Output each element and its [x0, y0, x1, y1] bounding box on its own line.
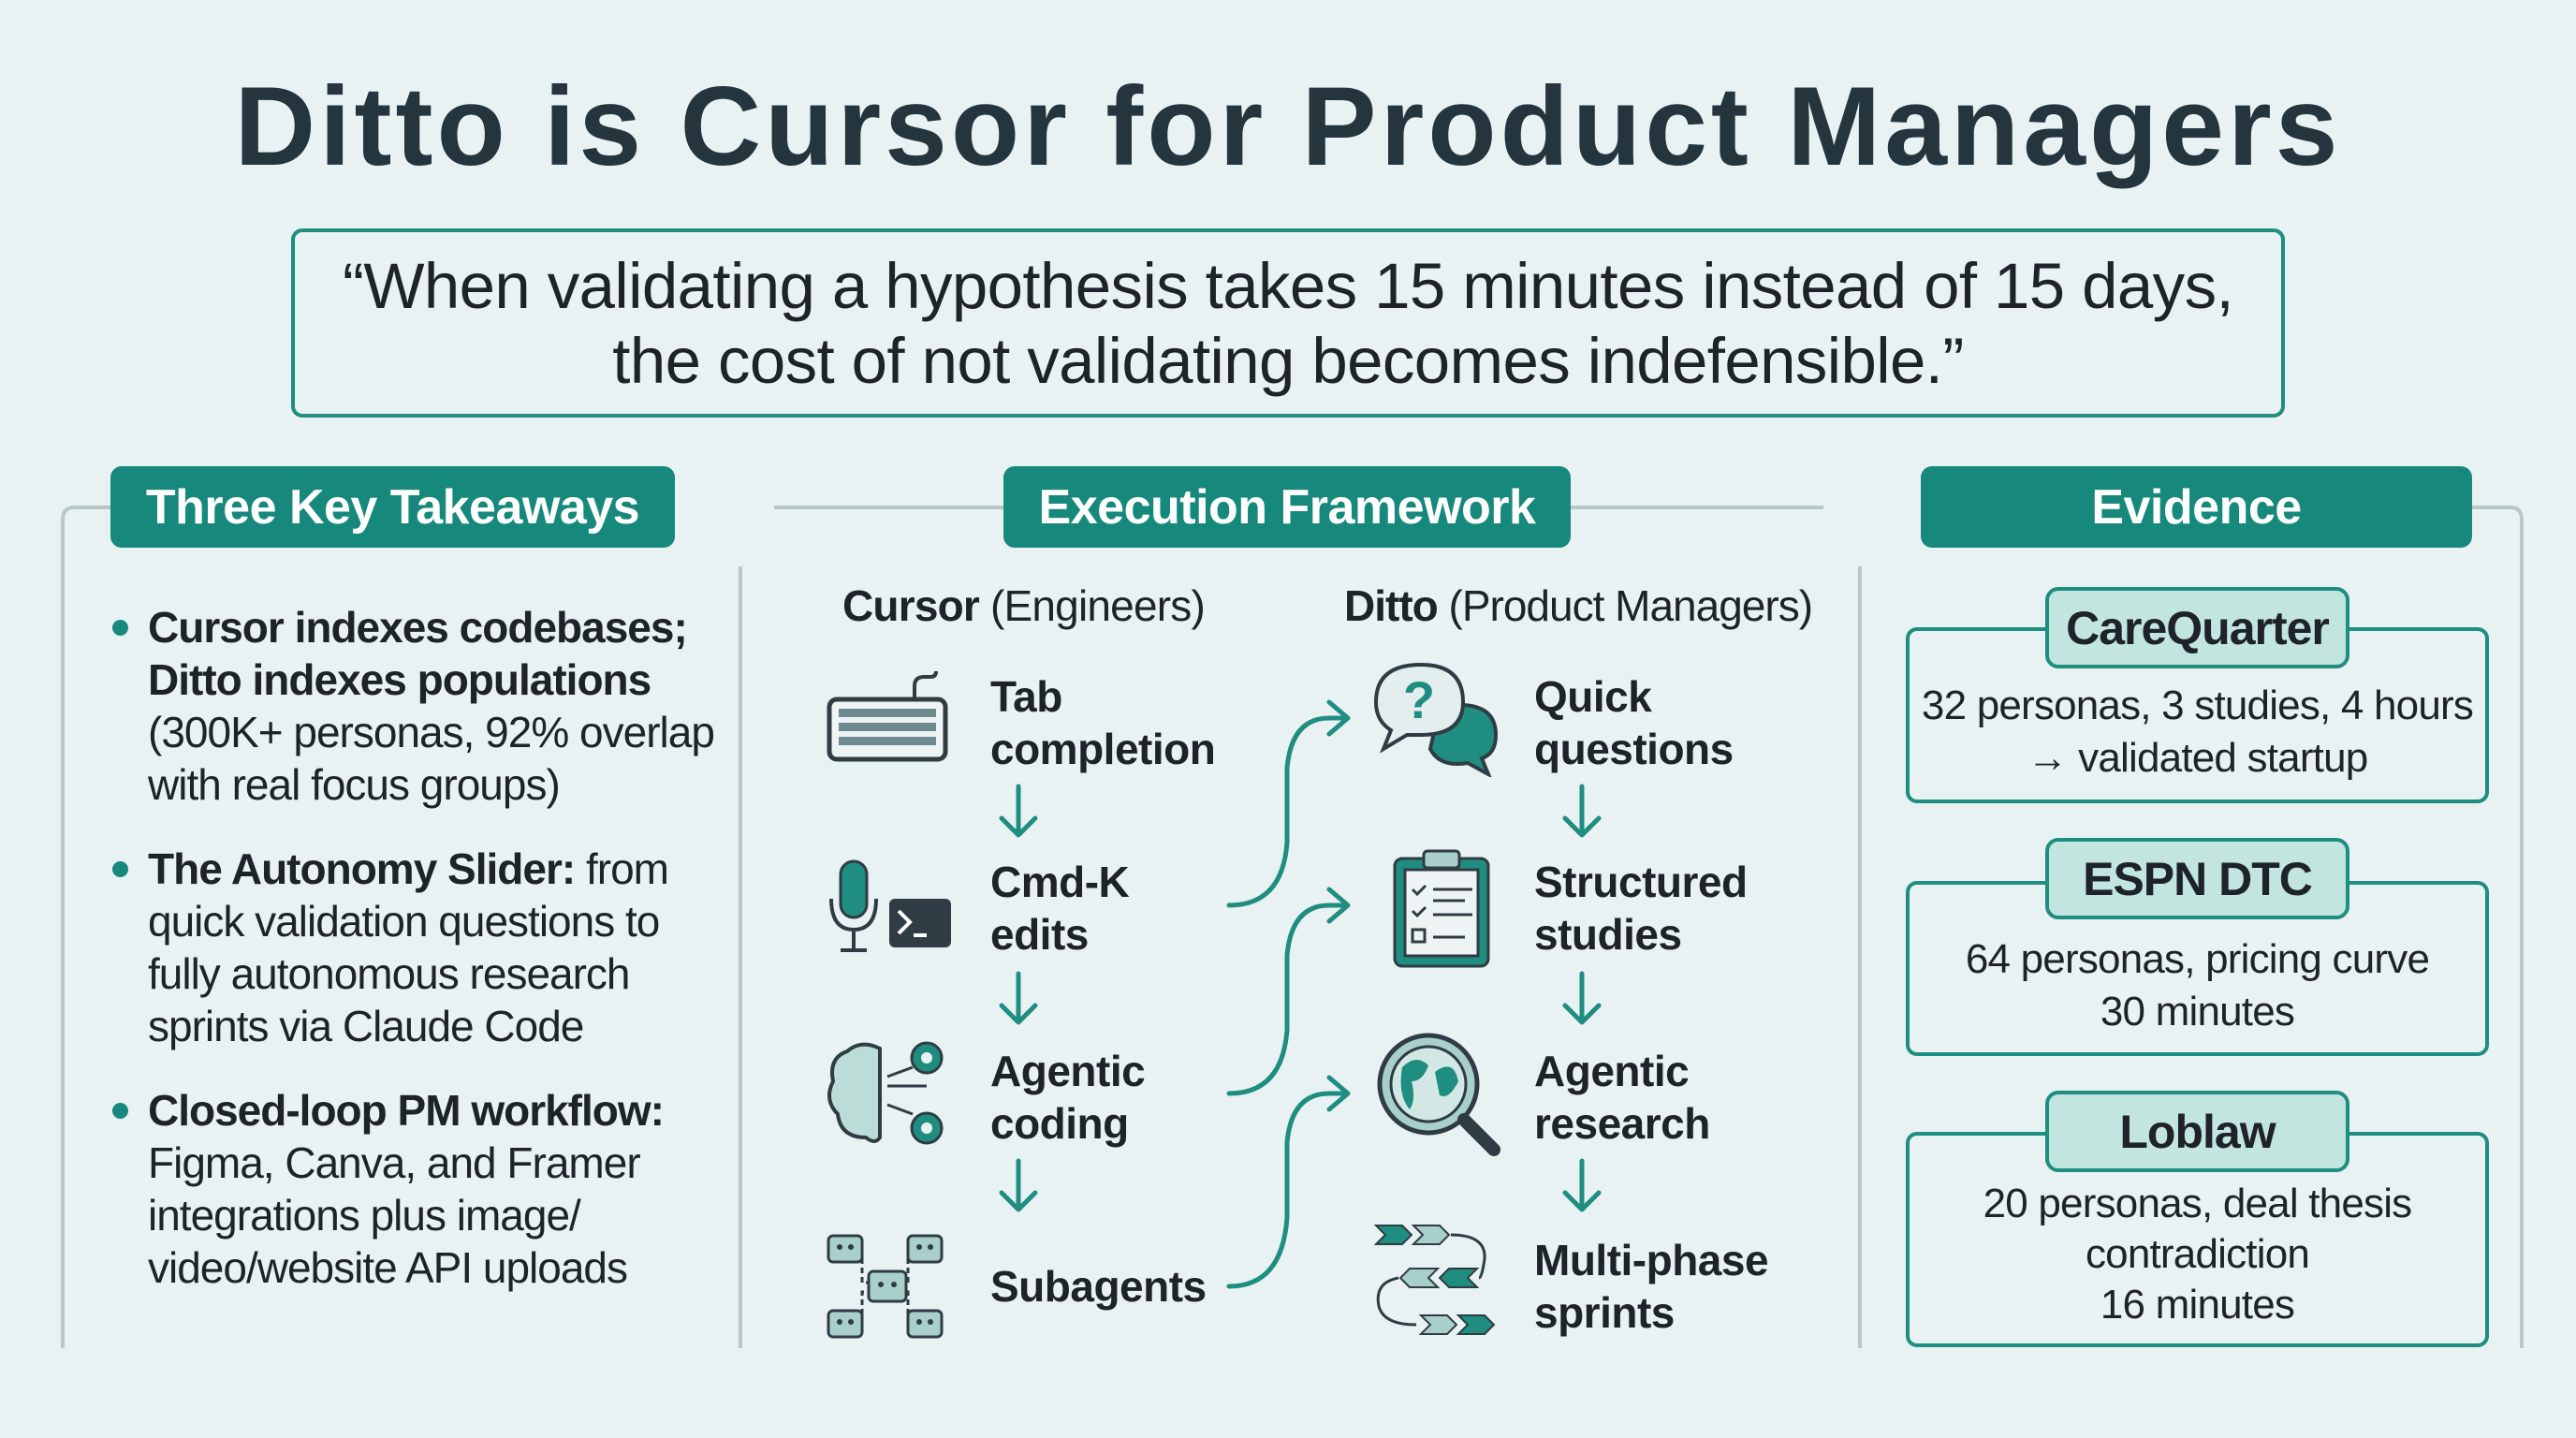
icon: speech bubbles: ? [1403, 670, 1435, 729]
label: Agentic coding [990, 1047, 1145, 1148]
bullet 2: The Autonomy Slider: from quick validation questions to fully autonomous research sprints via Claude Code [148, 844, 668, 1050]
tab: Loblaw [2045, 1091, 2349, 1172]
quote box: “When validating a hypothesis takes 15 minutes instead of 15 days, [343, 250, 2233, 322]
icon: speech bubbles [1374, 663, 1498, 777]
label: Tab completion [990, 672, 1215, 773]
title: Ditto is Cursor for Product Managers [235, 64, 2341, 189]
label: Quick questions: questions [1534, 725, 1734, 773]
label: Structured studies [1534, 858, 1748, 959]
icon: keyboard [827, 671, 947, 762]
label: Agentic research [1534, 1047, 1710, 1148]
icon: globe magnifier [1378, 1034, 1500, 1156]
tab: CareQuarter: CareQuarter [2066, 601, 2329, 653]
bullet 1: Cursor indexes codebases; Ditto indexes populations (300K+ personas, 92% overlap with real focus groups) [148, 603, 714, 809]
heading: Execution Framework [1003, 466, 1571, 548]
icon: brain gears [827, 1041, 944, 1144]
label: Cmd-K edits: Cmd-K [990, 858, 1129, 906]
card: Loblaw: contradiction [2086, 1231, 2309, 1277]
card: Loblaw: 20 personas, deal thesis [1983, 1181, 2411, 1226]
icon: clipboard [1393, 850, 1490, 968]
heading: Evidence: Evidence [2091, 479, 2302, 534]
card: CareQuarter: 32 personas, 3 studies, 4 hours [1922, 682, 2473, 728]
quote box [291, 228, 2285, 418]
label: Structured studies: studies [1534, 910, 1682, 959]
tab: ESPN DTC: ESPN DTC [2083, 852, 2312, 904]
bullet 3: Closed-loop PM workflow: Figma, Canva, and Framer integrations plus image/ video/website API uploads [148, 1086, 664, 1292]
tab: ESPN DTC [2045, 838, 2349, 919]
label: Subagents: Subagents [990, 1262, 1207, 1311]
quote box: the cost of not validating becomes indefensible.” [612, 325, 1964, 397]
icon: robots [827, 1234, 944, 1339]
label: Multi-phase sprints: Multi-phase [1534, 1236, 1768, 1284]
card: Loblaw [1906, 1132, 2489, 1347]
label: Cmd-K edits: edits [990, 910, 1089, 959]
card: ESPN DTC [1906, 881, 2489, 1056]
label: Structured studies: Structured [1534, 858, 1748, 906]
heading: Evidence [1921, 466, 2472, 548]
column header: Cursor: Cursor (Engineers) [842, 581, 1205, 630]
heading: Three Key Takeaways [110, 466, 675, 548]
label: Agentic coding: coding [990, 1099, 1129, 1148]
label: Agentic research: research [1534, 1099, 1710, 1148]
label: Multi-phase sprints [1534, 1236, 1768, 1337]
label: Agentic coding: Agentic [990, 1047, 1145, 1095]
label: Quick questions [1534, 672, 1734, 773]
label: Tab completion: Tab [990, 672, 1062, 721]
label: Quick questions: Quick [1534, 672, 1651, 721]
column header: Ditto: Ditto (Product Managers) [1344, 581, 1812, 630]
card: CareQuarter: → validated startup [2027, 735, 2367, 781]
tab: Loblaw: Loblaw [2119, 1105, 2276, 1157]
icon: sprint chevrons [1374, 1225, 1496, 1335]
heading: Three Key Takeaways: Three Key Takeaways [146, 479, 639, 534]
label: Cmd-K edits [990, 858, 1129, 959]
tab: CareQuarter [2045, 587, 2349, 668]
card: Loblaw: 16 minutes [2100, 1282, 2294, 1328]
card: ESPN DTC: 30 minutes [2100, 989, 2294, 1034]
heading: Execution Framework: Execution Framework [1039, 479, 1535, 534]
label: Agentic research: Agentic [1534, 1047, 1689, 1095]
label: Tab completion: completion [990, 725, 1215, 773]
card: CareQuarter [1906, 627, 2489, 803]
icon: mic and terminal [829, 859, 951, 952]
label: Multi-phase sprints: sprints [1534, 1288, 1675, 1337]
card: ESPN DTC: 64 personas, pricing curve [1966, 936, 2429, 982]
